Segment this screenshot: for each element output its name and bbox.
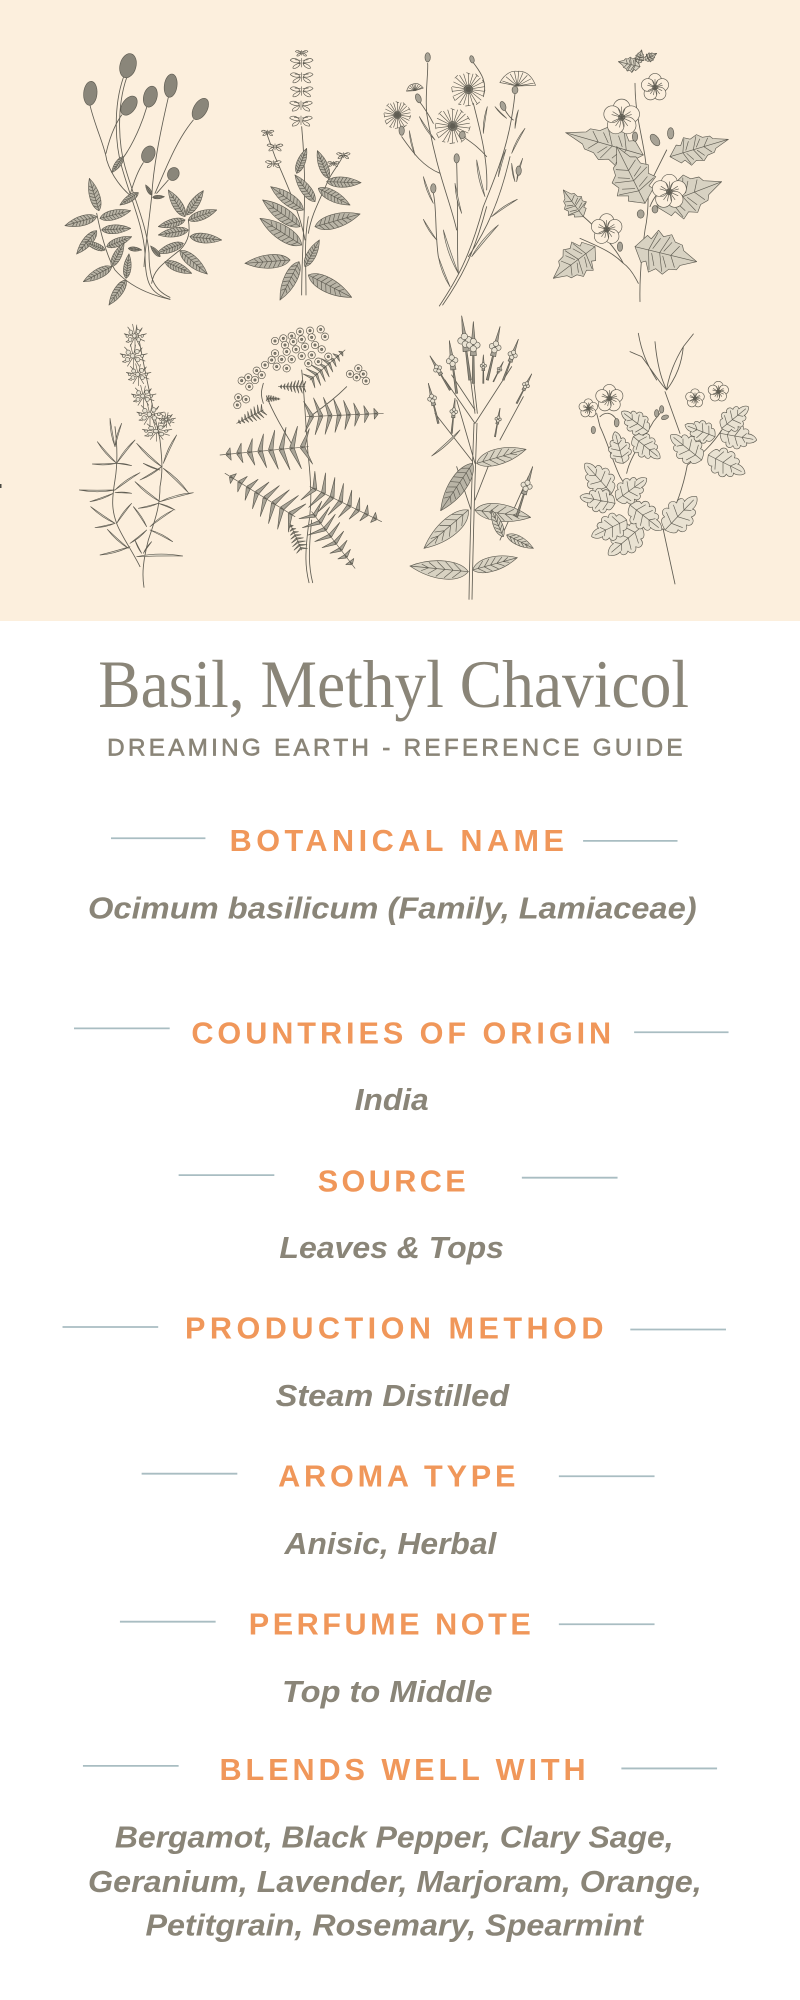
heading: PRODUCTION METHOD (185, 1311, 604, 1345)
heading: COUNTRIES OF ORIGIN (191, 1017, 611, 1051)
section: countries of origin (74, 1017, 729, 1117)
plant: mallow with round flowers (543, 49, 732, 302)
plant: narrow-leaved savory (79, 324, 193, 587)
section: production method (63, 1311, 726, 1413)
value: Leaves & Tops (279, 1231, 504, 1265)
value: blends list: Bergamot, Black Pepper, Clary Sage, (115, 1821, 674, 1855)
plant: cornflower (384, 53, 536, 306)
value: blends list: Geranium, Lavender, Marjoram, Orange, (88, 1865, 702, 1899)
section: source (179, 1165, 618, 1265)
value: Ocimum basilicum (Family, Lamiaceae) (88, 892, 697, 926)
section: perfume note (120, 1607, 655, 1709)
heading: BOTANICAL NAME (230, 824, 564, 858)
value: blends list (88, 1821, 702, 1943)
section: botanical name (88, 824, 697, 926)
value: India (355, 1083, 429, 1117)
heading: PERFUME NOTE (249, 1607, 531, 1641)
plant: burnet with oval flower heads (64, 52, 222, 308)
heading: SOURCE (318, 1165, 466, 1199)
section: blends well with (83, 1753, 717, 1943)
value: Steam Distilled (276, 1379, 510, 1413)
plant: sage with flower spike (244, 50, 362, 304)
heading: BLENDS WELL WITH (219, 1753, 586, 1787)
value: Top to Middle (282, 1675, 493, 1709)
panel: botanical illustration (0, 0, 800, 621)
value: blends list: Petitgrain, Rosemary, Spearmint (145, 1909, 645, 1943)
heading: AROMA TYPE (278, 1459, 515, 1493)
subtitle: DREAMING EARTH - REFERENCE GUIDE (107, 734, 683, 761)
plant: verbena with slender spikes (409, 315, 538, 599)
text column (63, 647, 729, 1943)
title: Basil, Methyl Chavicol (98, 647, 689, 722)
plant: tansy with feathered fronds (215, 326, 390, 583)
value: Anisic, Herbal (283, 1527, 498, 1561)
plant: celandine with lobed leaves (575, 333, 759, 584)
section: aroma type (142, 1459, 655, 1561)
